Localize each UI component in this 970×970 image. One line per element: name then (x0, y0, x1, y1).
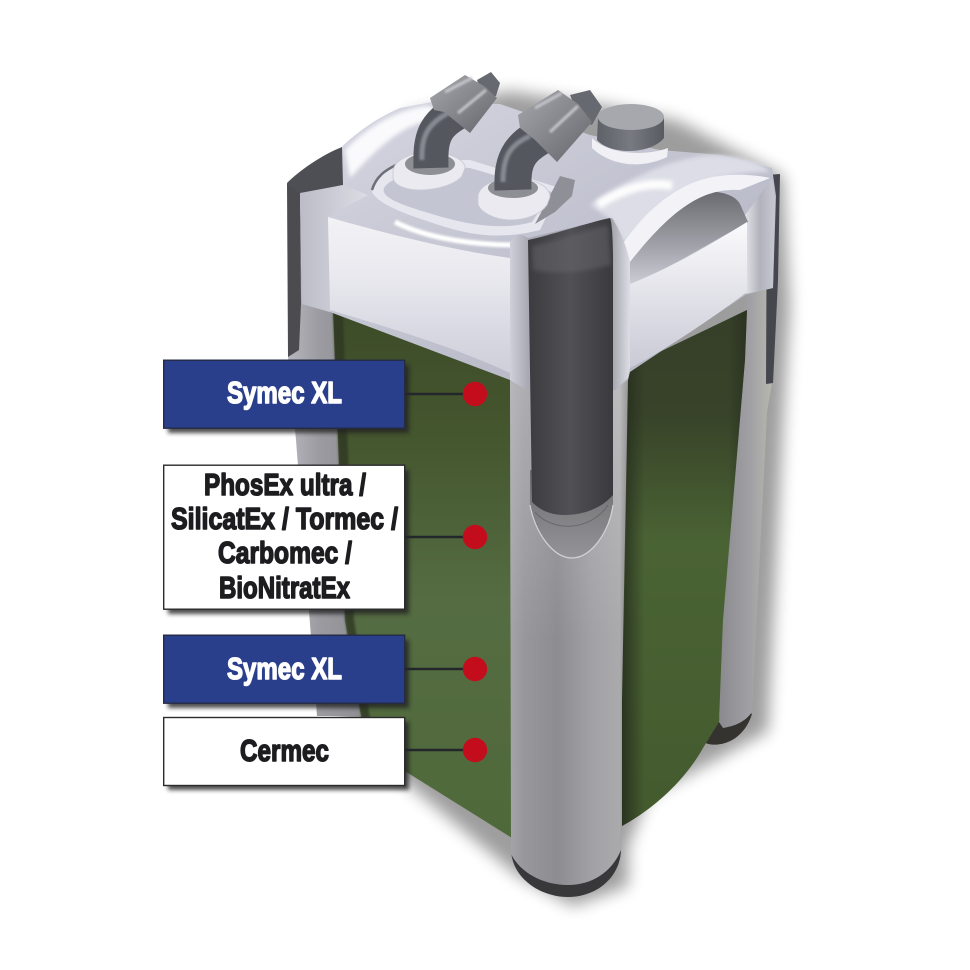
front lid rim highlight (395, 222, 515, 245)
right collar (478, 178, 550, 220)
right front lid panel (630, 222, 747, 368)
right lid top surface highlight (590, 155, 770, 255)
lid body (300, 102, 776, 392)
callout: mid media list: Carbomec / (218, 535, 352, 570)
callout: Symec XL top (164, 360, 487, 433)
U-shaped grip recess (530, 470, 613, 558)
back right leg and foot (704, 174, 780, 745)
callout: mid media list: BioNitratEx (219, 570, 351, 605)
right side handle recess (630, 192, 748, 288)
handle arc (620, 175, 770, 262)
callout: Cermec: Cermec (240, 733, 329, 768)
front corner leg with rubber foot (510, 378, 628, 897)
callout: mid media list: SilicatEx / Tormec / (171, 501, 398, 536)
callout: mid media list (164, 465, 487, 614)
soft drop shadow (313, 91, 790, 906)
right hose nut (518, 90, 602, 162)
callout: Cermec (164, 718, 487, 790)
dark clip at lid hinge (535, 176, 575, 224)
left front lid panel (328, 217, 510, 373)
right elbow pipe (503, 128, 558, 190)
left collar (393, 152, 465, 190)
back left dark corner cap (287, 147, 343, 194)
green canister panel: right face (622, 310, 747, 826)
callout: mid media list: PhosEx ultra / (204, 467, 366, 502)
callout: Symec XL top: Symec XL (227, 375, 342, 410)
grip top gloss (532, 225, 611, 272)
lower left lid rim (300, 185, 368, 312)
back left leg (287, 183, 360, 716)
left lid handle shine (345, 106, 435, 178)
right lid gloss streak (598, 184, 672, 205)
lid central platform (372, 160, 560, 236)
left elbow pipe (422, 106, 470, 168)
callout: Symec XL bottom: Symec XL (227, 651, 342, 686)
dark rubber grip strip (528, 218, 613, 515)
screw cap (592, 104, 668, 164)
green canister panel: left face (333, 310, 512, 838)
right side lid strip (745, 178, 775, 294)
product: external aquarium filter canister (287, 72, 790, 906)
callout: Symec XL bottom (164, 635, 487, 708)
left hose nut (430, 72, 500, 133)
left panel edge shading (333, 310, 372, 730)
corner lid piece (510, 218, 630, 392)
